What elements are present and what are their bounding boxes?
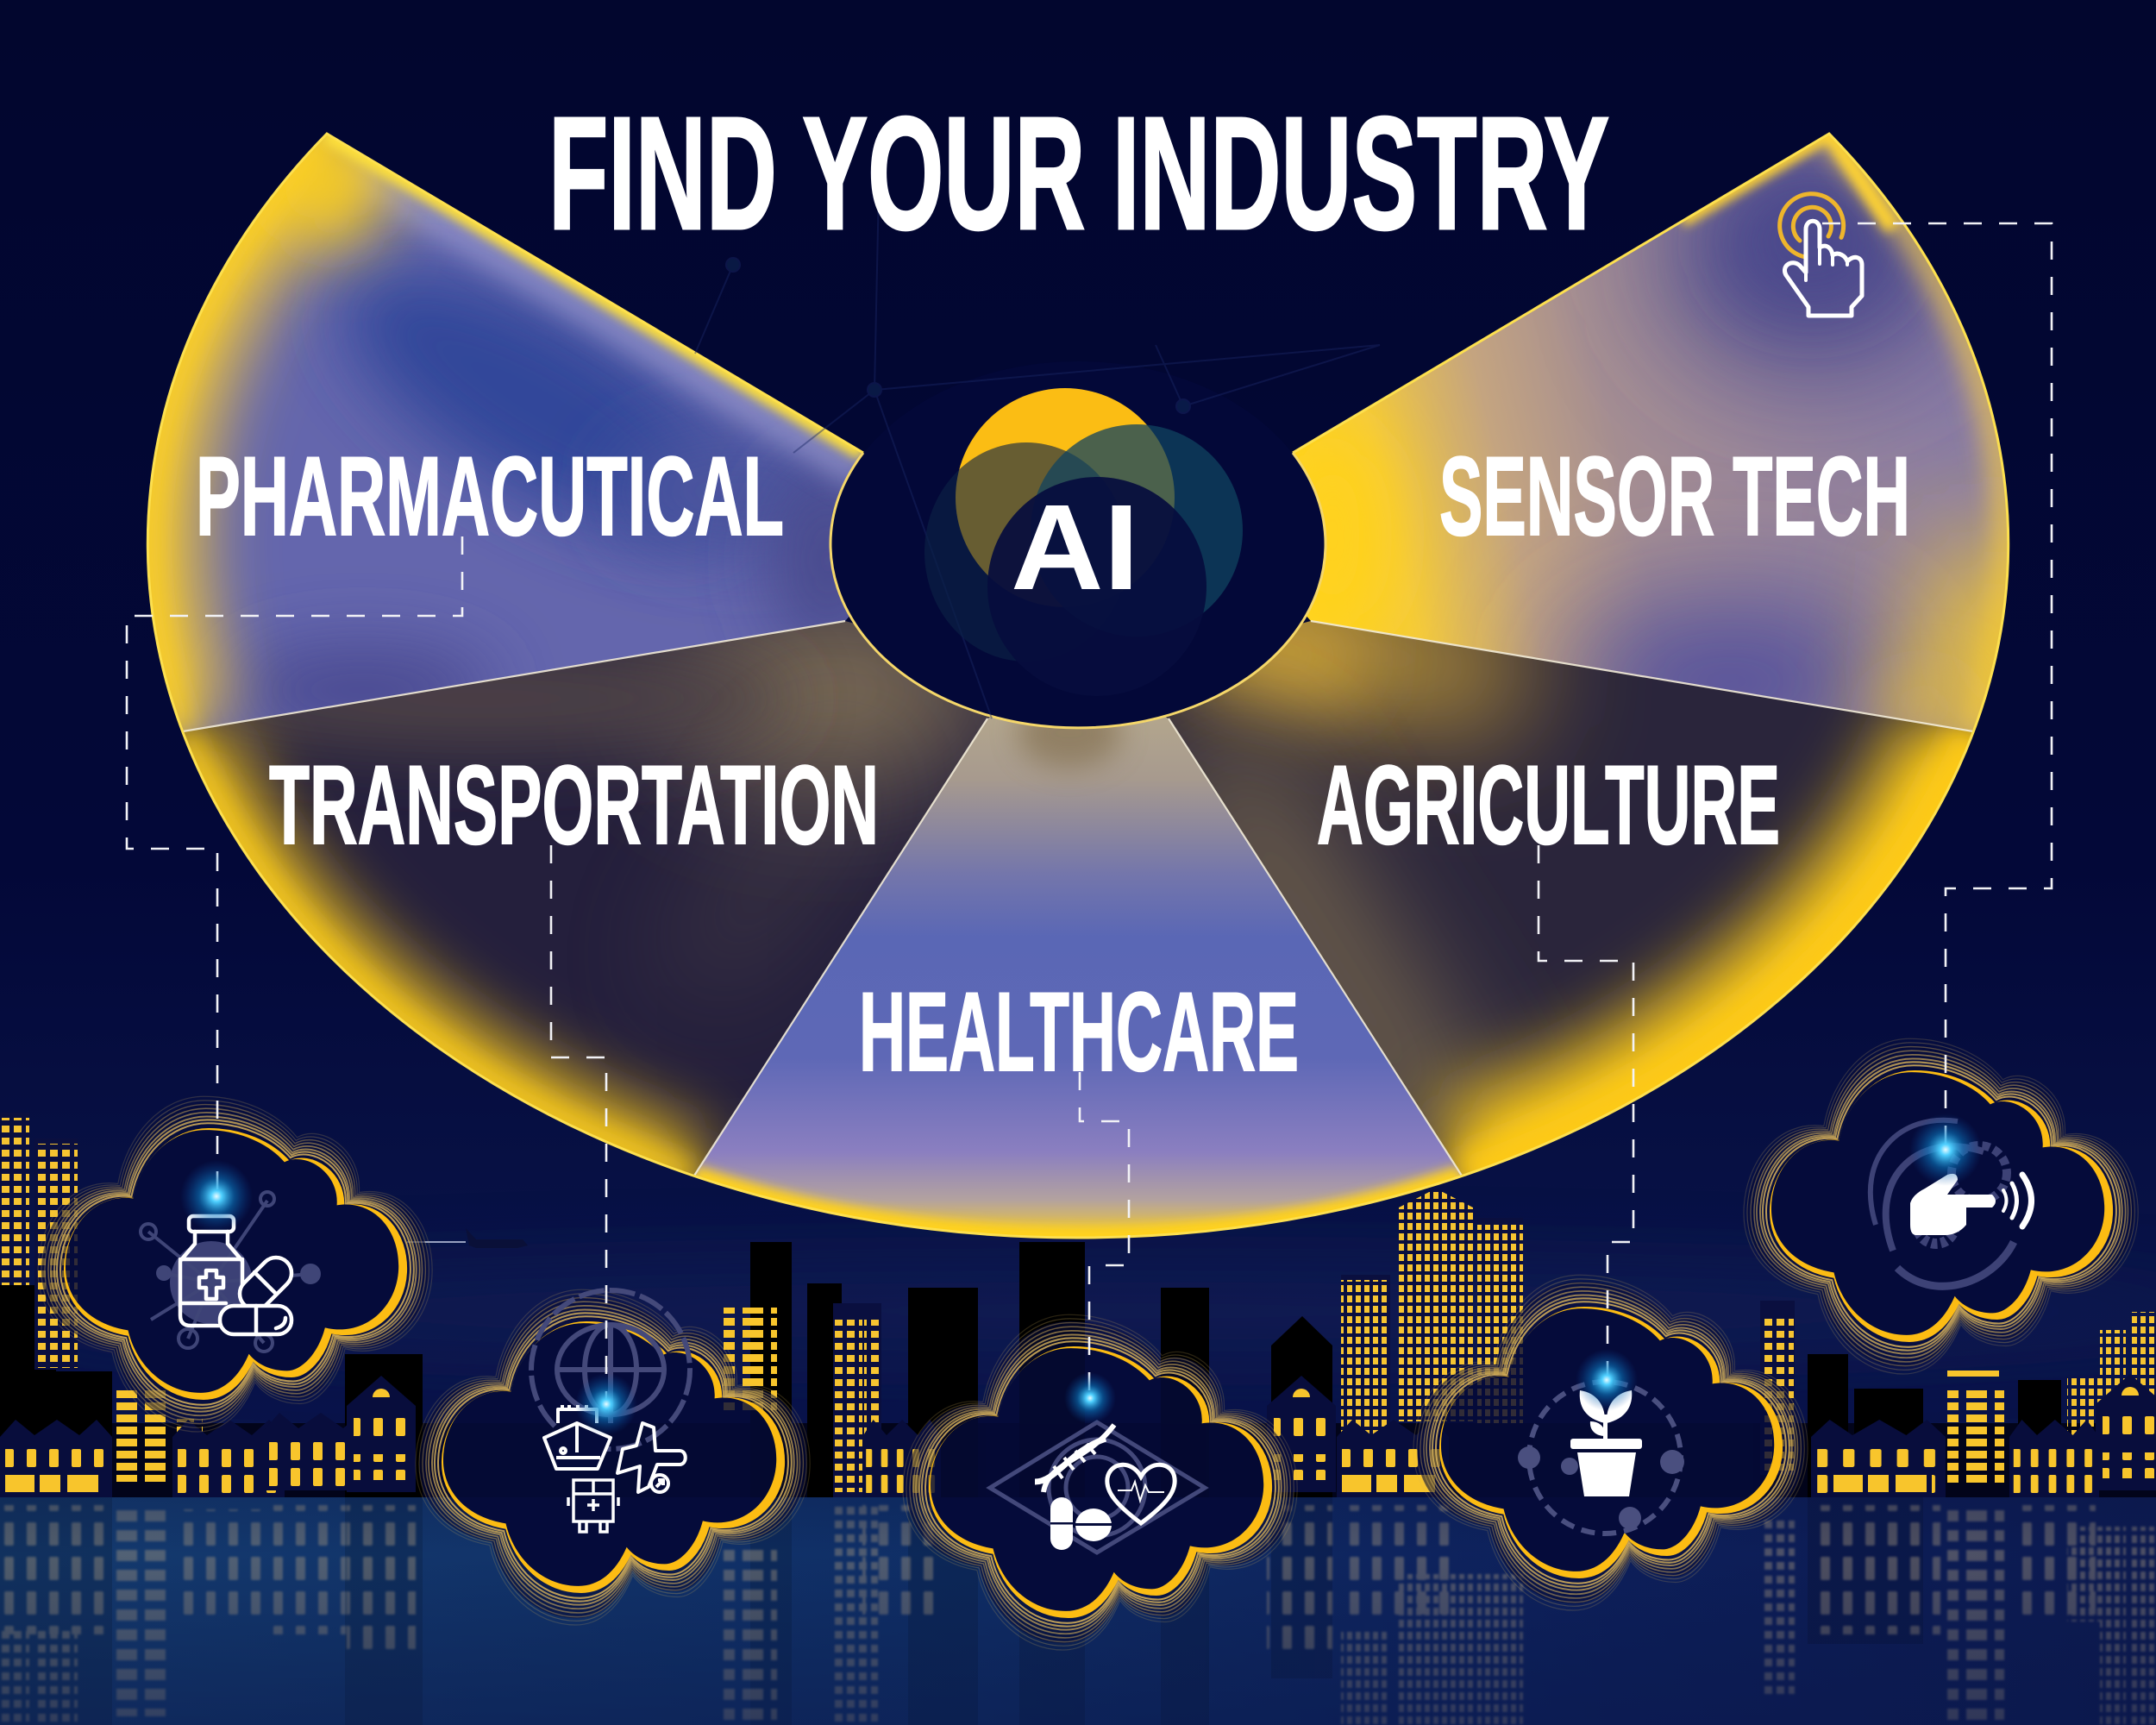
icon: medicine bottle and capsules — [180, 1216, 298, 1334]
label: agriculture: AGRICULTURE — [1317, 742, 1780, 868]
network lines — [695, 147, 1380, 718]
panel: healthcare sector — [681, 699, 1475, 1242]
icon: capsule and pill — [1050, 1497, 1112, 1550]
cloud: transportation — [0, 1113, 2156, 1625]
icon: touch hand — [1776, 190, 1862, 316]
ghost orbit ring — [1518, 1382, 1684, 1534]
ghost eye icon — [990, 1422, 1205, 1552]
icon: pointing hand — [1910, 1174, 1996, 1235]
cloud: agriculture — [0, 1113, 2156, 1610]
ghost swirls and gear — [1871, 1120, 2014, 1286]
ghost globe icon — [531, 1290, 690, 1449]
label: pharmacutical: PHARMACUTICAL — [196, 433, 784, 559]
label: healthcare: HEALTHCARE — [859, 969, 1299, 1095]
panel: pharmaceutical sector — [148, 135, 864, 731]
airplane — [407, 1228, 528, 1248]
cyan glow nodes — [180, 1113, 1982, 1435]
cloud: healthcare — [0, 1113, 2156, 1650]
cloud: pharmaceutical — [0, 1096, 2156, 1497]
icon: ambulance bus — [568, 1480, 618, 1532]
icon: ship — [544, 1405, 611, 1469]
connector dashed lines — [127, 223, 2052, 1402]
logo text: AI: AI — [1011, 479, 1139, 615]
haze behind skyline — [0, 1259, 2156, 1363]
icon: DNA helix — [1035, 1425, 1114, 1492]
panel: sensor tech sector — [1292, 135, 2008, 731]
label: transportation: TRANSPORTATION — [269, 742, 879, 868]
panel: transportation sector — [185, 621, 989, 1175]
city skyline — [0, 1113, 2156, 1497]
logo: AI overlapping circles — [924, 388, 1243, 696]
panel: agriculture sector — [1167, 621, 1971, 1175]
ghost virus icon — [141, 1192, 319, 1352]
hub: central ellipse — [830, 361, 1326, 729]
sector dividers and rim — [147, 134, 2009, 1238]
icon: airplane — [617, 1423, 686, 1492]
icon: signal waves — [2003, 1175, 2032, 1226]
water reflection — [0, 1497, 2156, 1725]
icon: heart with pulse — [1107, 1465, 1175, 1523]
cloud: sensor tech — [0, 1038, 2156, 1497]
icon: potted plant — [1570, 1390, 1642, 1496]
